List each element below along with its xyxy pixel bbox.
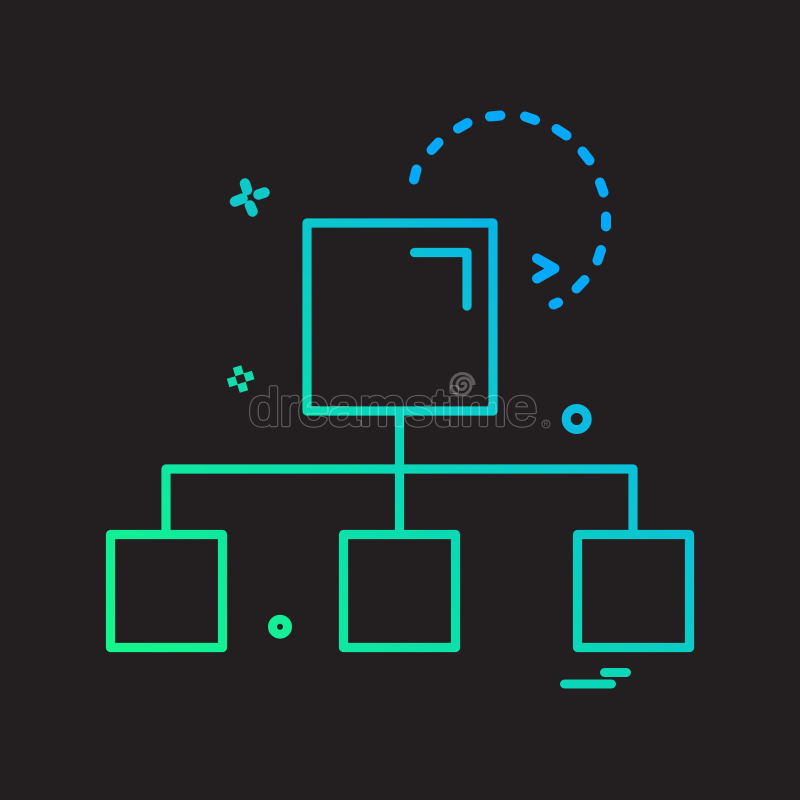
child square middle [344,534,456,648]
parent square [307,223,493,411]
connector lines [166,411,633,530]
inner corner mark [414,252,467,306]
icon: four petal sparkle [235,184,264,212]
child square right [578,534,690,648]
icon: ring large [566,408,587,430]
watermark registered mark: R [544,422,549,428]
watermark [249,372,550,428]
icon: dashed circular arrow [414,116,606,304]
watermark registered mark [542,420,550,428]
infographic: hierarchy network icon [106,110,694,688]
icon: checker diamond [227,365,254,393]
arrow head [537,258,554,278]
watermark spiral [451,374,474,395]
icon: hierarchy diagram [110,223,690,648]
child square left [110,534,222,648]
watermark text: dreamstime [249,379,537,437]
icon: ring small [272,619,288,634]
icon: dash lines [564,672,626,684]
